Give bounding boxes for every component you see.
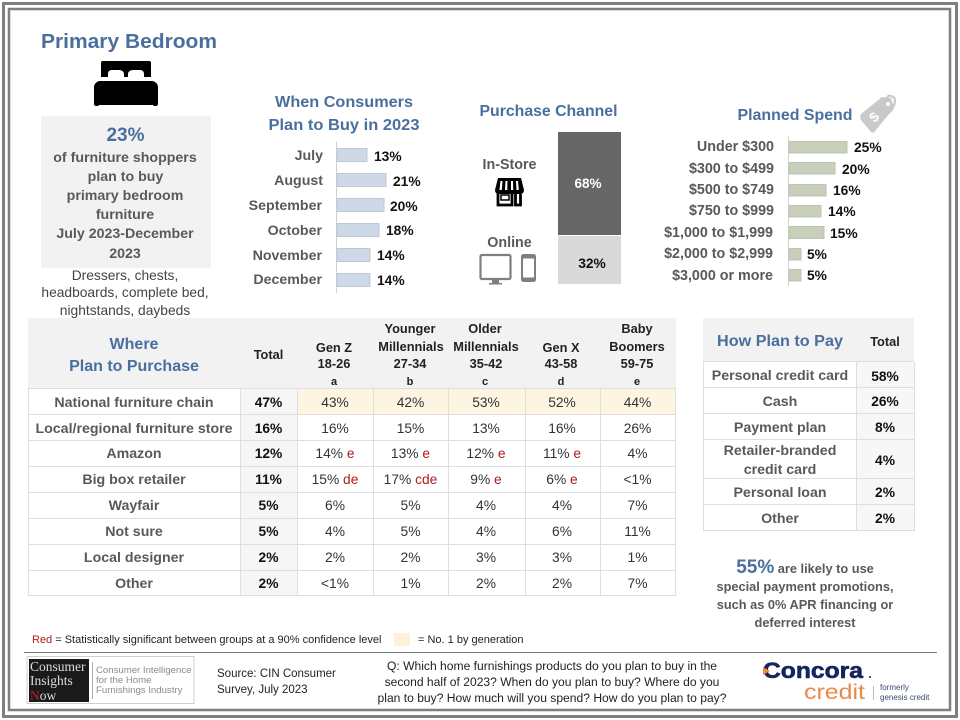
table heading: Where <box>110 336 159 353</box>
text: product list: headboards, complete bed, <box>41 285 209 300</box>
column headers: 18-26 <box>318 356 350 371</box>
stacked bar: purchase channel: 68% <box>574 176 602 191</box>
bar chart: when consumers plan to buy: 13% <box>374 149 402 164</box>
row: wayfair <box>109 498 647 514</box>
logo: consumer insights now: Consumer Intelligence <box>96 665 191 676</box>
text: product list: nightstands, daybeds <box>60 303 190 318</box>
row: local designer: 3% <box>552 550 572 565</box>
row: local designer: Local designer <box>84 550 185 566</box>
pay rows: Personal loan <box>733 485 827 501</box>
survey question: Q: Which home furnishings products do you plan to buy in the <box>387 659 717 673</box>
source note: Source: CIN Consumer <box>217 668 336 680</box>
bar chart: when consumers plan to buy: 21% <box>393 174 421 189</box>
panel: 23% callout: furniture <box>96 207 154 223</box>
bar chart: planned spend: 16% <box>833 183 861 198</box>
column headers: Millennials <box>453 339 519 354</box>
row: amazon: 12% e <box>466 446 506 461</box>
heading: purchase channel: Purchase Channel <box>480 103 618 120</box>
pay rows: credit card <box>744 462 816 478</box>
column headers <box>254 321 665 388</box>
row: local/regional furniture store: Local/regional furniture store <box>35 421 233 437</box>
bar chart: planned spend: $1,000 to $1,999 <box>664 225 773 241</box>
icon: monitor <box>480 255 510 284</box>
row: other: 1% <box>401 576 420 591</box>
bar chart: planned spend: 15% <box>830 226 858 241</box>
logo: consumer insights now: Furnishings Industry <box>96 685 183 696</box>
panel: 23% callout: 2023 <box>109 246 141 262</box>
callout: 55% payment promotions: deferred interest <box>754 615 856 630</box>
icon: bed <box>94 61 158 106</box>
panel: 23% callout: July 2023-December <box>56 226 194 242</box>
logo: consumer insights now: Now <box>30 688 56 703</box>
pay rows: Retailer-branded <box>724 443 836 459</box>
callout: 55% payment promotions <box>716 557 894 630</box>
survey question <box>378 659 727 705</box>
column headers: Gen Z <box>316 340 352 355</box>
bar chart: planned spend: $2,000 to $2,999 <box>664 246 773 262</box>
row: other: 2% <box>476 576 496 591</box>
row: amazon <box>106 446 647 462</box>
heading: when consumers plan to buy <box>268 94 420 134</box>
bar chart: planned spend: 20% <box>842 162 870 177</box>
row: local/regional furniture store: 15% <box>397 421 424 436</box>
panel: 23% callout <box>41 116 211 268</box>
bar chart: planned spend: 25% <box>854 140 882 155</box>
bar chart: when consumers plan to buy: September <box>249 198 322 214</box>
row: other <box>115 576 647 592</box>
icon: store <box>495 178 524 205</box>
row: wayfair: Wayfair <box>109 498 160 514</box>
heading: when consumers plan to buy: Plan to Buy in 2023 <box>268 117 420 134</box>
logo: concora credit <box>763 658 930 704</box>
row: not sure: 5% <box>259 524 278 539</box>
logo: consumer insights now <box>27 656 194 704</box>
pay rows: 8% <box>875 420 895 435</box>
legend: significance: Red = Statistically significant between groups at a 90% confidence level <box>32 634 381 646</box>
row: national furniture chain <box>54 395 651 411</box>
column headers: Gen X <box>543 340 580 355</box>
bar chart: planned spend <box>664 136 882 286</box>
row: other: 7% <box>628 576 647 591</box>
bar chart: when consumers plan to buy: July <box>295 148 323 164</box>
column headers: Baby <box>621 321 654 336</box>
row: wayfair: 5% <box>259 498 278 513</box>
bar chart: planned spend: 5% <box>807 247 827 262</box>
row: local/regional furniture store: 16% <box>321 421 349 436</box>
row: big box retailer: <1% <box>624 472 652 487</box>
row: amazon: 12% <box>255 446 282 461</box>
heading: when consumers plan to buy: When Consumers <box>275 94 413 111</box>
row: amazon: Amazon <box>106 446 162 462</box>
icon: phone <box>522 255 535 281</box>
bar chart: planned spend: $750 to $999 <box>689 203 774 219</box>
row: local/regional furniture store <box>35 421 651 437</box>
row: national furniture chain: 52% <box>548 395 576 410</box>
logo: consumer insights now: for the Home <box>96 675 151 686</box>
bar chart: planned spend: 14% <box>828 204 856 219</box>
row: other: 2% <box>552 576 572 591</box>
icon: price tag: $ <box>866 108 883 125</box>
source note: Survey, July 2023 <box>217 684 308 696</box>
pay rows: 4% <box>875 453 895 468</box>
pay rows: 26% <box>871 394 899 409</box>
row: amazon: 11% e <box>543 446 581 461</box>
column headers: Millennials <box>378 339 444 354</box>
column headers: 35-42 <box>470 356 502 371</box>
table heading <box>69 336 199 375</box>
column headers: a <box>331 376 338 388</box>
column headers: c <box>482 376 488 388</box>
bar chart: when consumers plan to buy: November <box>253 248 322 264</box>
bar chart: planned spend: $300 to $499 <box>689 161 774 177</box>
column headers: 43-58 <box>545 356 577 371</box>
column headers: Total <box>254 347 283 362</box>
row: amazon: 13% e <box>391 446 430 461</box>
row: national furniture chain: 43% <box>321 395 349 410</box>
logo: concora credit: genesis credit <box>880 693 930 702</box>
stacked bar: purchase channel <box>558 132 621 284</box>
icon: price tag <box>860 96 895 133</box>
row: national furniture chain: 44% <box>624 395 651 410</box>
row: big box retailer: 17% cde <box>384 472 438 487</box>
row: not sure: 4% <box>476 524 496 539</box>
row: national furniture chain: 47% <box>255 395 282 410</box>
row: not sure: 11% <box>624 524 651 539</box>
bar chart: planned spend: Under $300 <box>697 139 774 155</box>
stacked bar: purchase channel: 32% <box>578 256 606 271</box>
row: national furniture chain: 53% <box>472 395 500 410</box>
panel: 23% callout: of furniture shoppers <box>53 150 197 166</box>
label: in-store: In-Store <box>482 157 537 173</box>
column headers: b <box>407 376 414 388</box>
row: local/regional furniture store: 13% <box>472 421 500 436</box>
bar chart: planned spend: 5% <box>807 268 827 283</box>
column headers: d <box>558 376 564 388</box>
row: amazon: 4% <box>628 446 647 461</box>
logo: concora credit: formerly <box>880 683 909 692</box>
callout: 55% payment promotions: 55% are likely to use <box>736 557 874 578</box>
text: product list: Dressers, chests, <box>72 268 178 283</box>
table: where plan to purchase <box>28 318 676 596</box>
table: how plan to pay <box>703 318 914 531</box>
row: big box retailer: Big box retailer <box>82 472 186 488</box>
bar chart: when consumers plan to buy: December <box>253 272 322 288</box>
row: local/regional furniture store: 16% <box>255 421 282 436</box>
row: local designer: 1% <box>628 550 647 565</box>
row: big box retailer: 6% e <box>546 472 578 487</box>
column headers: Younger <box>385 321 435 336</box>
logo: concora credit: credit <box>804 681 865 704</box>
title: Primary Bedroom <box>41 30 217 53</box>
pay rows: 2% <box>875 485 895 500</box>
column headers: 27-34 <box>394 356 427 371</box>
row: not sure <box>105 524 651 540</box>
row: local/regional furniture store: 26% <box>624 421 651 436</box>
bar chart: planned spend: $3,000 or more <box>672 268 773 284</box>
heading: planned spend: Planned Spend <box>738 107 852 124</box>
row: wayfair: 4% <box>476 498 496 513</box>
row: big box retailer: 9% e <box>470 472 502 487</box>
pay rows: Payment plan <box>734 420 826 436</box>
row: local designer: 2% <box>401 550 420 565</box>
row: local designer <box>84 550 647 566</box>
row: wayfair: 7% <box>628 498 647 513</box>
column headers: 59-75 <box>621 356 653 371</box>
row: not sure: 5% <box>401 524 420 539</box>
bar chart: planned spend: $500 to $749 <box>689 182 774 198</box>
row: other: Other <box>115 576 153 592</box>
pay rows: 58% <box>871 369 899 384</box>
row: not sure: 6% <box>552 524 572 539</box>
row: local designer: 3% <box>476 550 496 565</box>
callout: 55% payment promotions: special payment promotions, <box>716 579 894 594</box>
row: not sure: 4% <box>325 524 345 539</box>
logo: consumer insights now: Consumer <box>30 659 86 674</box>
label: online: Online <box>487 235 532 251</box>
row: big box retailer: 11% <box>255 472 282 487</box>
table heading: How Plan to Pay <box>717 333 843 350</box>
row: other: <1% <box>321 576 349 591</box>
bar chart: when consumers plan to buy: 14% <box>377 248 405 263</box>
bar chart: when consumers plan to buy: 20% <box>390 199 418 214</box>
row: big box retailer <box>82 472 652 488</box>
pay rows: Cash <box>763 394 797 410</box>
bar chart: when consumers plan to buy: October <box>268 223 322 239</box>
row: other: 2% <box>259 576 278 591</box>
legend: no. 1 by generation: = No. 1 by generation <box>418 634 524 646</box>
survey question: plan to buy? How much will you spend? How do you plan to pay? <box>378 691 727 705</box>
panel: 23% callout: primary bedroom <box>67 188 183 204</box>
panel: 23% callout: 23% <box>106 125 145 146</box>
row: local/regional furniture store: 16% <box>548 421 576 436</box>
bar chart: when consumers plan to buy: 18% <box>386 223 414 238</box>
row: national furniture chain: 42% <box>397 395 424 410</box>
column header: Total <box>870 334 900 349</box>
panel: 23% callout: plan to buy <box>88 169 163 185</box>
pay rows: 2% <box>875 511 895 526</box>
row: wayfair: 4% <box>552 498 572 513</box>
text: product list <box>41 268 209 318</box>
pay rows: Other <box>761 511 799 527</box>
row: not sure: Not sure <box>105 524 163 540</box>
bar chart: when consumers plan to buy <box>249 142 421 293</box>
source note <box>217 668 336 696</box>
table heading: Plan to Purchase <box>69 358 199 375</box>
callout: 55% payment promotions: such as 0% APR financing or <box>717 597 893 612</box>
survey question: second half of 2023? When do you plan to buy? Where do you <box>385 675 719 689</box>
row: wayfair: 6% <box>325 498 345 513</box>
column headers: e <box>634 376 640 388</box>
logo: consumer insights now: Insights <box>30 673 73 688</box>
bar chart: when consumers plan to buy: 14% <box>377 273 405 288</box>
logo: concora credit: Concora <box>763 658 864 683</box>
row: local designer: 2% <box>259 550 278 565</box>
row: local designer: 2% <box>325 550 345 565</box>
row: big box retailer: 15% de <box>312 472 359 487</box>
row: national furniture chain: National furniture chain <box>54 395 214 411</box>
row: wayfair: 5% <box>401 498 420 513</box>
pay rows <box>712 368 899 527</box>
bar chart: when consumers plan to buy: August <box>274 173 323 189</box>
row: amazon: 14% e <box>315 446 355 461</box>
column headers: Older <box>468 321 502 336</box>
pay rows: Personal credit card <box>712 368 848 384</box>
column headers: Boomers <box>609 339 665 354</box>
